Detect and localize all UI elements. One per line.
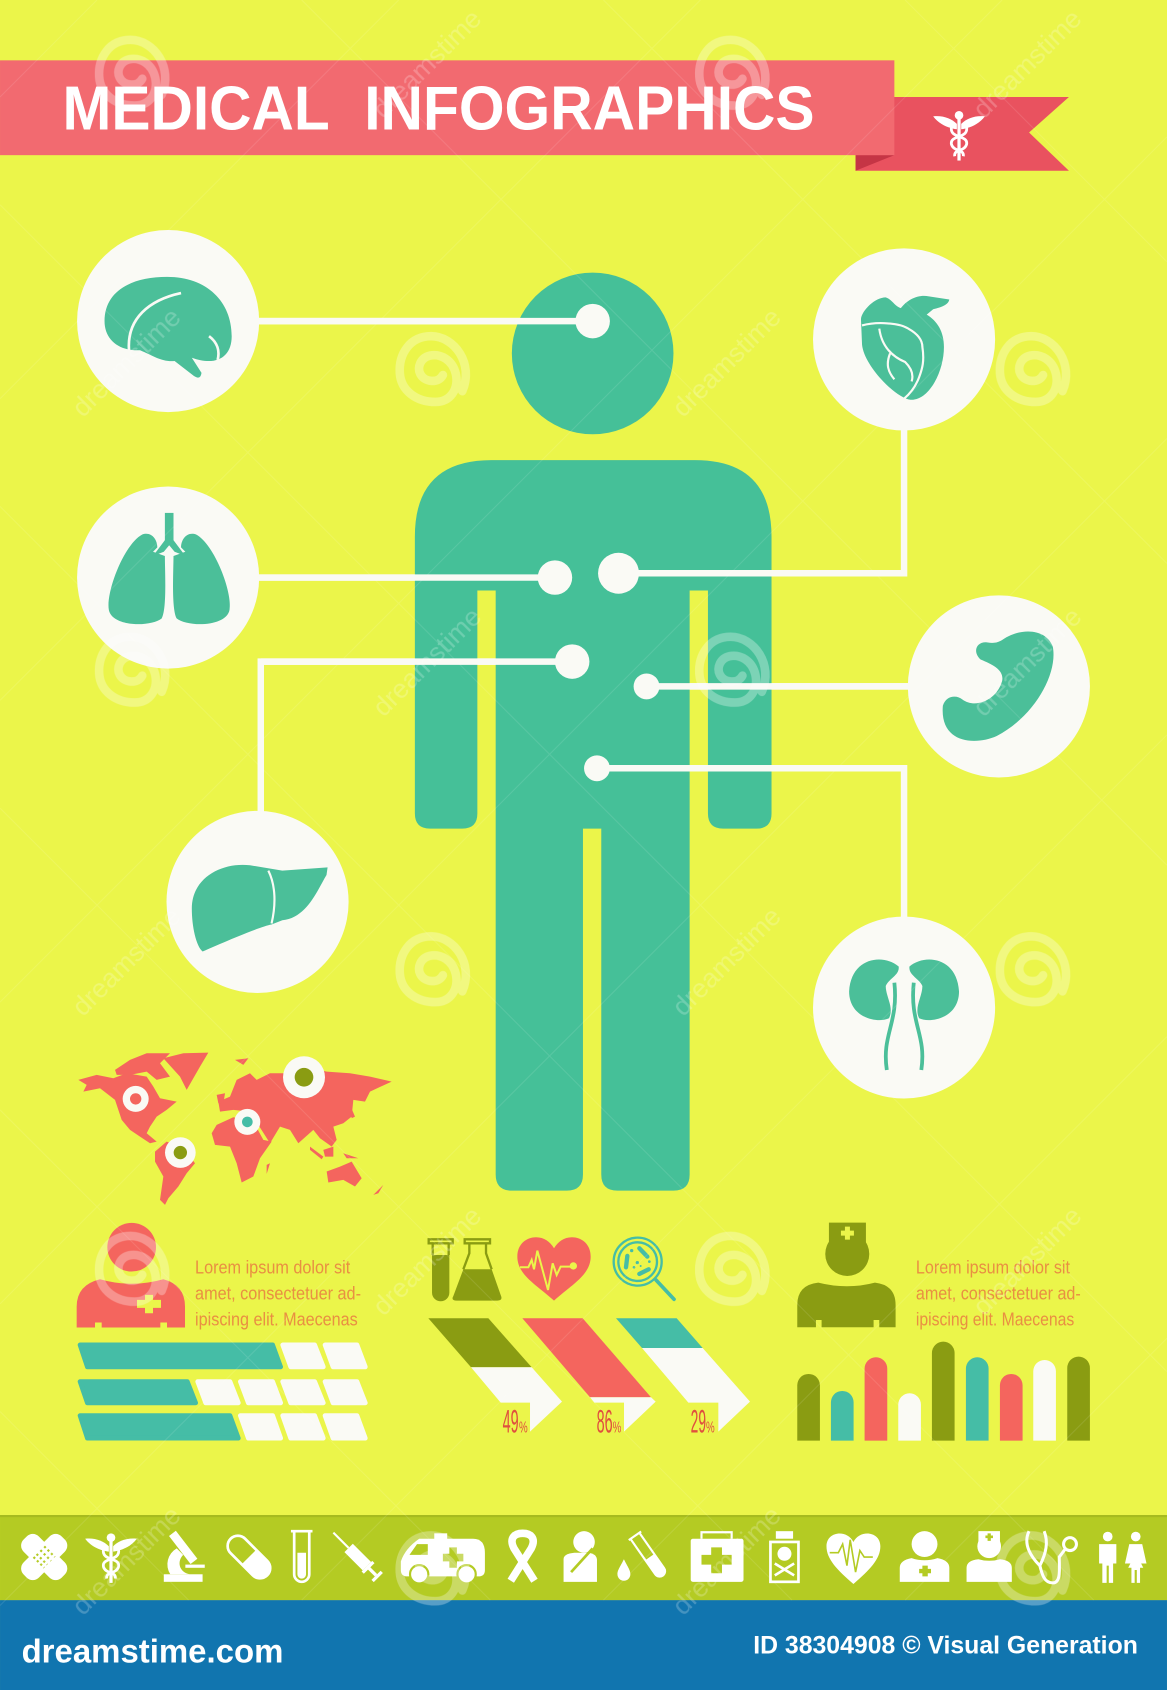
icon: ambulance bbox=[401, 1533, 485, 1583]
watermark: dreamstime bbox=[66, 1500, 187, 1621]
progress bar 3 bbox=[80, 1416, 365, 1438]
chevron 49%: % bbox=[519, 1419, 528, 1436]
icon: first aid kit bbox=[691, 1532, 744, 1582]
watermark: dreamstime bbox=[967, 601, 1087, 722]
body marker dots bbox=[538, 304, 659, 781]
icon: ribbon bbox=[511, 1533, 534, 1581]
world map bbox=[78, 1053, 392, 1205]
text block: right lorem: ipiscing elit. Maecenas bbox=[916, 1308, 1074, 1329]
text block: left lorem bbox=[195, 1257, 361, 1329]
watermark: dreamstime bbox=[967, 3, 1087, 124]
icon: poison bottle bbox=[770, 1531, 798, 1582]
icon: doctor bbox=[900, 1531, 949, 1582]
connector lines over the figure bbox=[259, 321, 911, 768]
organ: brain bbox=[77, 230, 259, 412]
watermark: dreamstime bbox=[366, 601, 487, 722]
figure head bbox=[512, 273, 673, 434]
footer bar bbox=[0, 1600, 1167, 1690]
icon: stethoscope bbox=[1027, 1531, 1076, 1583]
chevron 49% bbox=[428, 1318, 562, 1439]
human figure bbox=[259, 273, 911, 1191]
title: INFOGRAPHICS bbox=[364, 73, 815, 143]
icon: heartbeat bbox=[517, 1237, 591, 1301]
chevron 29%: % bbox=[706, 1419, 715, 1436]
connector lines bbox=[259, 321, 911, 919]
bar chart bbox=[797, 1342, 1090, 1441]
text block: left lorem: Lorem ipsum dolor sit bbox=[195, 1257, 350, 1278]
footer logo text: dreamstime.com bbox=[22, 1634, 283, 1671]
icon: test tube bbox=[291, 1531, 313, 1582]
chevron 86% bbox=[522, 1318, 656, 1439]
icon: syringe bbox=[328, 1527, 384, 1583]
icon: patient with sling bbox=[564, 1531, 597, 1582]
text block: left lorem: ipiscing elit. Maecenas bbox=[195, 1308, 358, 1329]
text block: right lorem: Lorem ipsum dolor sit bbox=[916, 1257, 1070, 1278]
chevron 29%: 29 bbox=[691, 1403, 706, 1439]
progress bars bbox=[80, 1345, 365, 1438]
icon: pill bbox=[223, 1531, 276, 1584]
watermark: dreamstime bbox=[366, 3, 487, 124]
icon: test tube and flask bbox=[429, 1239, 501, 1301]
text block: right lorem bbox=[916, 1257, 1081, 1329]
centre icons and chevrons bbox=[428, 1237, 750, 1439]
banner fold bbox=[856, 155, 894, 171]
organ: stomach bbox=[908, 595, 1090, 777]
watermark: dreamstime bbox=[967, 1200, 1087, 1321]
organ: liver bbox=[166, 811, 349, 993]
banner tail bbox=[856, 97, 1069, 171]
watermark: dreamstime bbox=[66, 901, 187, 1022]
chevron 86%: % bbox=[613, 1419, 622, 1436]
icon: magnifier with bacteria bbox=[614, 1238, 674, 1299]
chevron 86%: 86 bbox=[597, 1403, 613, 1439]
icon: caduceus bbox=[85, 1533, 137, 1583]
watermark: dreamstime bbox=[666, 901, 787, 1022]
organ: heart bbox=[813, 248, 995, 430]
progress bar 2 bbox=[80, 1382, 365, 1403]
chevron 29% bbox=[616, 1318, 750, 1439]
icon: caduceus emblem bbox=[933, 111, 985, 161]
icon: ECG heart bbox=[826, 1533, 880, 1584]
watermark: dreamstime bbox=[366, 1200, 487, 1321]
icon: man and woman bbox=[1099, 1532, 1147, 1583]
icon: doctor bbox=[77, 1223, 185, 1328]
chevron 49%: 49 bbox=[503, 1403, 519, 1439]
footer credit text: ID 38304908 © Visual Generation bbox=[753, 1632, 1138, 1659]
banner ribbon bbox=[0, 60, 894, 155]
text block: left lorem: amet, consectetuer ad- bbox=[195, 1283, 361, 1304]
icon: nurse bbox=[797, 1223, 896, 1327]
organ: lungs bbox=[77, 487, 259, 669]
watermark: dreamstime bbox=[666, 302, 787, 422]
watermark: dreamstime bbox=[666, 1500, 787, 1621]
map pin: Russia bbox=[283, 1056, 325, 1098]
title: MEDICAL bbox=[63, 73, 330, 143]
icon: bandage bbox=[6, 1519, 82, 1595]
icon strip bbox=[0, 1515, 1167, 1600]
map pin: South America bbox=[165, 1137, 196, 1168]
organ: kidneys bbox=[813, 916, 995, 1099]
text block: right lorem: amet, consectetuer ad- bbox=[916, 1283, 1081, 1304]
title banner bbox=[0, 60, 1069, 171]
map pin: North America bbox=[123, 1086, 149, 1112]
icon: microscope bbox=[164, 1533, 205, 1582]
icon: test tube and drop bbox=[617, 1532, 669, 1581]
title bbox=[63, 73, 815, 143]
progress bar 1 bbox=[80, 1345, 365, 1367]
continents bbox=[78, 1053, 392, 1205]
watermark: dreamstime bbox=[66, 302, 187, 422]
map pin: Africa bbox=[234, 1109, 260, 1135]
icon: nurse bbox=[967, 1531, 1012, 1582]
figure body bbox=[415, 460, 772, 1191]
